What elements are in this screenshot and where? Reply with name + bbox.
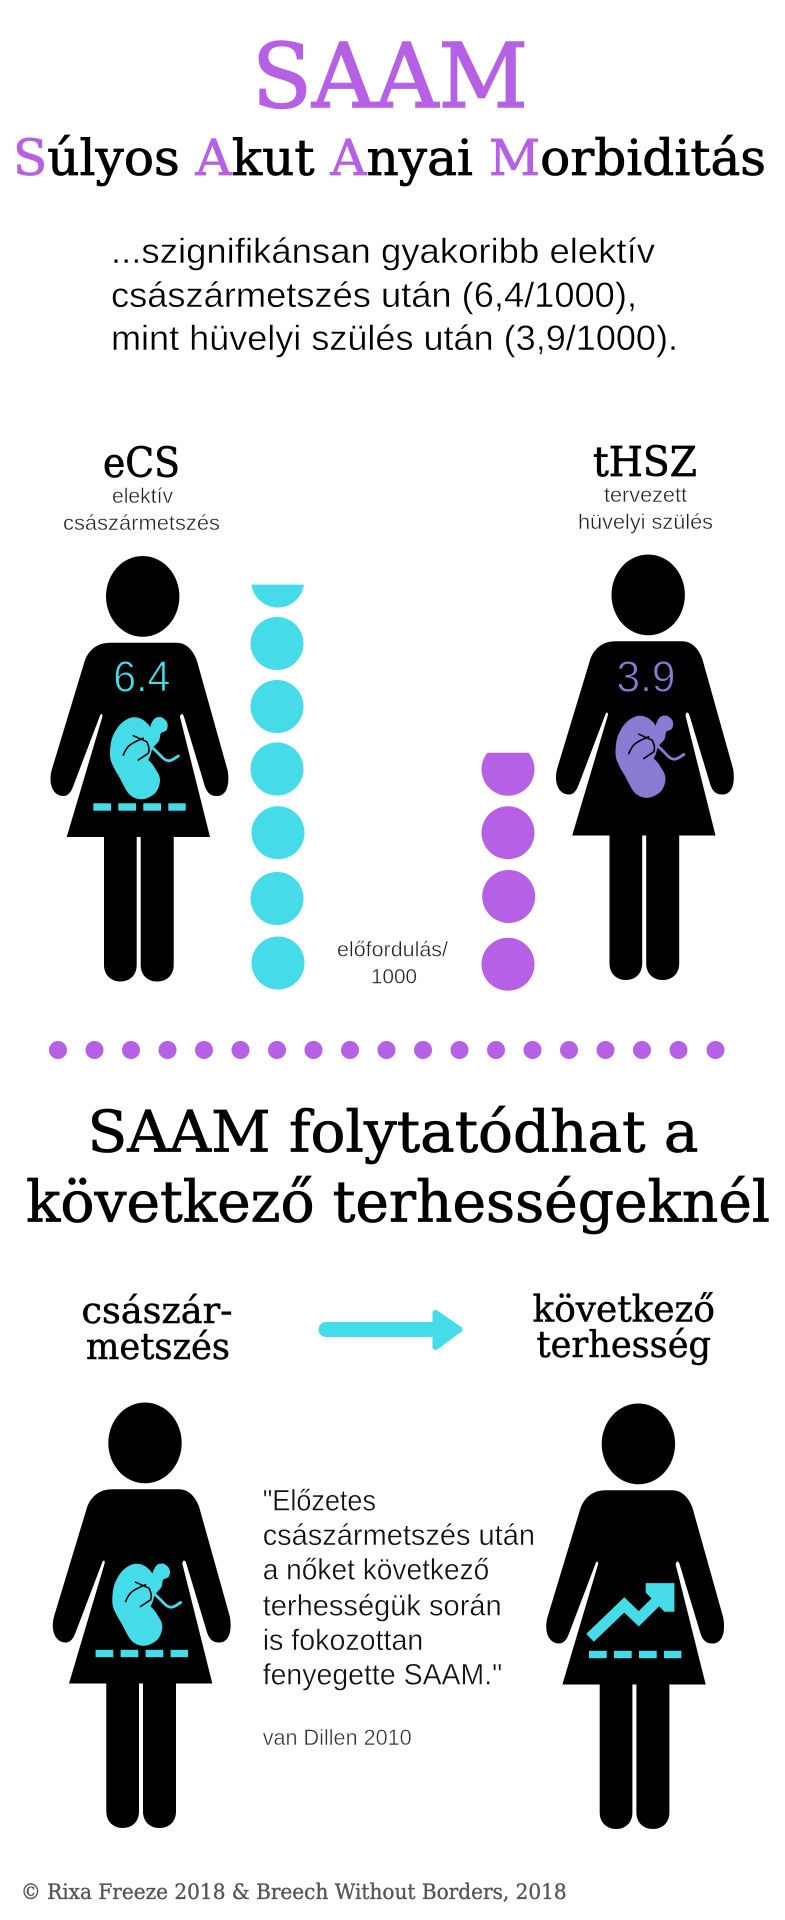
intro text block: császármetszés után (6,4/1000), — [111, 276, 637, 315]
figure: eCS woman with 6.4: 6.4 — [113, 653, 170, 702]
title: SAAM: SAAM — [252, 24, 528, 128]
label: planned vaginal birth — [578, 484, 713, 534]
arrow — [326, 1313, 460, 1347]
quote text: fenyegette SAAM." — [263, 1658, 502, 1691]
figure: woman with rising risk arrow and scar — [546, 1404, 724, 1829]
quote text: "Előzetes — [263, 1485, 376, 1518]
quote text: a nőket következő — [263, 1553, 489, 1586]
chart label: incidence per 1000: 1000 — [371, 966, 417, 988]
chart: blue circles 6.4 per 1000 — [250, 554, 304, 990]
label: caesarean — [82, 1291, 232, 1368]
chart label: incidence per 1000: előfordulás/ — [337, 938, 448, 962]
section heading — [26, 1100, 770, 1236]
intro text block — [111, 232, 678, 358]
label: next pregnancy: következő — [532, 1290, 715, 1331]
label: elective caesarean: császármetszés — [63, 512, 220, 535]
section heading: következő terhességeknél — [26, 1170, 770, 1236]
heading: tHSZ: tHSZ — [593, 438, 697, 486]
intro text block: mint hüvelyi szülés után (3,9/1000). — [111, 319, 678, 358]
quote text: terhességük során — [263, 1590, 502, 1623]
citation: van Dillen 2010 — [263, 1725, 412, 1750]
section heading: SAAM folytatódhat a — [88, 1100, 698, 1166]
chart label: incidence per 1000 — [337, 938, 448, 988]
quote text — [263, 1485, 535, 1691]
dotted divider — [49, 1041, 724, 1059]
chart: purple circles 3.9 per 1000 — [482, 743, 535, 991]
figure: woman with fetus and scar — [53, 1402, 231, 1828]
label: next pregnancy — [532, 1290, 715, 1366]
footer credit: © Rixa Freeze 2018 & Breech Without Borders, 2018 — [21, 1880, 567, 1904]
intro text block: ...szignifikánsan gyakoribb elektív — [111, 232, 656, 271]
heading: eCS: eCS — [103, 439, 180, 487]
label: caesarean: metszés — [86, 1327, 230, 1368]
label: planned vaginal birth: hüvelyi szülés — [578, 511, 713, 534]
figure: tHSZ woman with 3.9 — [556, 554, 734, 980]
label: planned vaginal birth: tervezett — [604, 484, 687, 507]
quote text: császármetszés után — [263, 1519, 535, 1552]
label: elective caesarean: elektív — [112, 485, 173, 508]
figure: tHSZ woman with 3.9: 3.9 — [616, 652, 676, 702]
quote text: is fokozottan — [263, 1624, 423, 1657]
label: elective caesarean — [63, 485, 220, 535]
label: next pregnancy: terhesség — [536, 1325, 711, 1366]
figure: eCS woman with 6.4 — [50, 556, 228, 982]
label: caesarean: császár- — [82, 1291, 232, 1332]
subtitle: Súlyos Akut Anyai Morbiditás: Súlyos Akut Anyai Morbiditás — [13, 129, 766, 187]
